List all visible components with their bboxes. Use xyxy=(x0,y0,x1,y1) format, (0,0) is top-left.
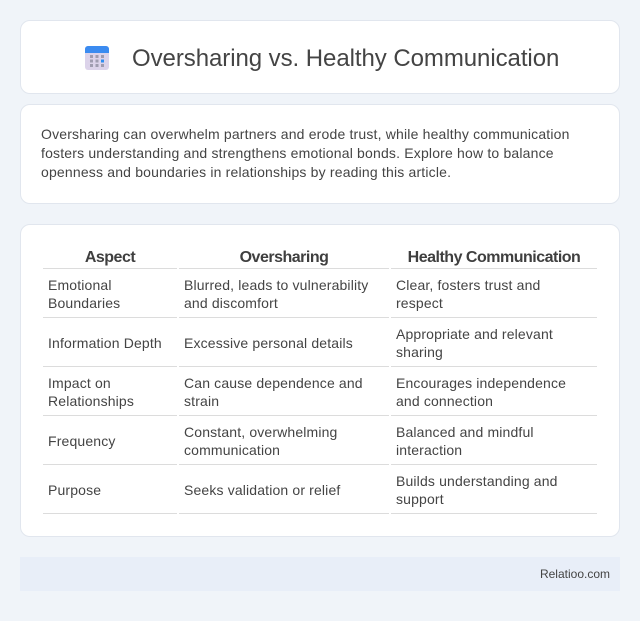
comparison table: Excessive personal details xyxy=(184,335,353,351)
intro card xyxy=(20,104,620,204)
comparison table: communication xyxy=(184,442,280,458)
intro text: Oversharing can overwhelm partners and erode trust, while healthy communication xyxy=(41,126,570,142)
comparison table: sharing xyxy=(396,344,443,360)
row: impact on relationships xyxy=(48,375,134,409)
comparison table: and connection xyxy=(396,393,493,409)
row: emotional boundaries: Emotional xyxy=(48,277,112,293)
comparison table: Clear, fosters trust and xyxy=(396,277,540,293)
comparison table: Blurred, leads to vulnerability xyxy=(184,277,368,293)
header: oversharing: Oversharing xyxy=(240,249,328,266)
footer bar xyxy=(20,557,620,591)
comparison table: Seeks validation or relief xyxy=(184,482,340,498)
comparison table: Encourages independence xyxy=(396,375,566,391)
comparison table: strain xyxy=(184,393,219,409)
header: healthy communication: Healthy Communication xyxy=(408,249,580,266)
header: aspect: Aspect xyxy=(85,249,135,266)
table card xyxy=(20,224,620,537)
row: impact on relationships: Impact on xyxy=(48,375,111,391)
comparison table: interaction xyxy=(396,442,462,458)
comparison table: respect xyxy=(396,295,443,311)
footer text: Relatioo.com xyxy=(540,567,610,581)
icon: calendar xyxy=(85,46,109,70)
title: Oversharing vs. Healthy Communication xyxy=(132,45,559,72)
title card xyxy=(20,20,620,94)
row: emotional boundaries xyxy=(48,277,120,311)
row: information depth: Information Depth xyxy=(48,335,162,351)
comparison table: Builds understanding and xyxy=(396,473,558,489)
comparison table: support xyxy=(396,491,444,507)
comparison table: Constant, overwhelming xyxy=(184,424,338,440)
row: purpose: Purpose xyxy=(48,482,101,498)
intro text: openness and boundaries in relationships by reading this article. xyxy=(41,164,451,180)
comparison table: and discomfort xyxy=(184,295,278,311)
comparison table: Can cause dependence and xyxy=(184,375,363,391)
comparison table: Balanced and mindful xyxy=(396,424,534,440)
row: emotional boundaries: Boundaries xyxy=(48,295,120,311)
comparison table: Appropriate and relevant xyxy=(396,326,553,342)
row: impact on relationships: Relationships xyxy=(48,393,134,409)
intro text xyxy=(41,126,570,180)
row: frequency: Frequency xyxy=(48,433,116,449)
intro text: fosters understanding and strengthens emotional bonds. Explore how to balance xyxy=(41,145,554,161)
